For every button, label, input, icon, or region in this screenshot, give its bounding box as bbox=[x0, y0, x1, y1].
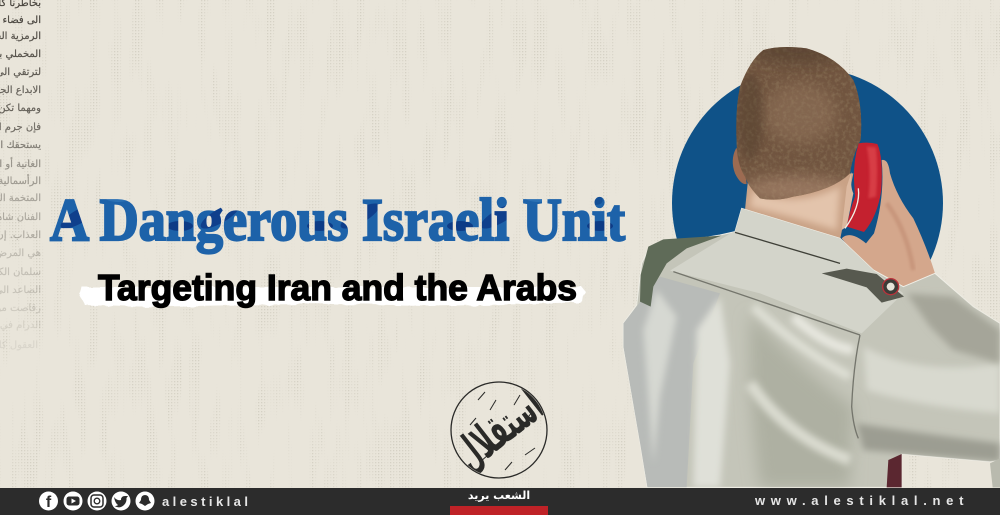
blue circle bbox=[672, 68, 943, 338]
hair bbox=[736, 37, 861, 203]
shirt bbox=[623, 208, 1000, 487]
left ear bbox=[733, 148, 747, 184]
icon: facebook: f bbox=[46, 494, 52, 511]
handle: alestiklal: alestiklal bbox=[162, 494, 251, 509]
tie strip bbox=[887, 454, 902, 487]
right epaulette with badge bbox=[822, 269, 904, 303]
title: A Dangerous Israeli Unit: A Dangerous Israeli Unit bbox=[50, 187, 625, 253]
subtitle white brush band bbox=[80, 287, 586, 307]
Al-Estiklal calligraphic logo: استقلال bbox=[444, 378, 554, 481]
icon: instagram bbox=[88, 492, 106, 510]
icon: youtube bbox=[64, 492, 82, 510]
left epaulette bbox=[640, 236, 722, 307]
hand holding handset bbox=[842, 160, 935, 289]
right ear and earpiece wire bbox=[842, 172, 853, 230]
subtitle: Targeting Iran and the Arabs: Targeting Iran and the Arabs bbox=[98, 267, 577, 308]
icon: twitter bbox=[112, 492, 130, 510]
website url: www.alestiklal.net bbox=[754, 493, 969, 508]
red telephone handset bbox=[847, 143, 882, 232]
faded Arabic newspaper column bbox=[0, 0, 41, 351]
man on the phone photo illustration bbox=[623, 37, 1000, 487]
social media icons bbox=[39, 492, 154, 511]
icon: snapchat bbox=[136, 492, 154, 510]
slogan in Arabic: الشعب يريد bbox=[468, 489, 530, 502]
footer bar bbox=[0, 488, 1000, 515]
red tab bbox=[450, 506, 548, 515]
neck bbox=[745, 173, 853, 240]
